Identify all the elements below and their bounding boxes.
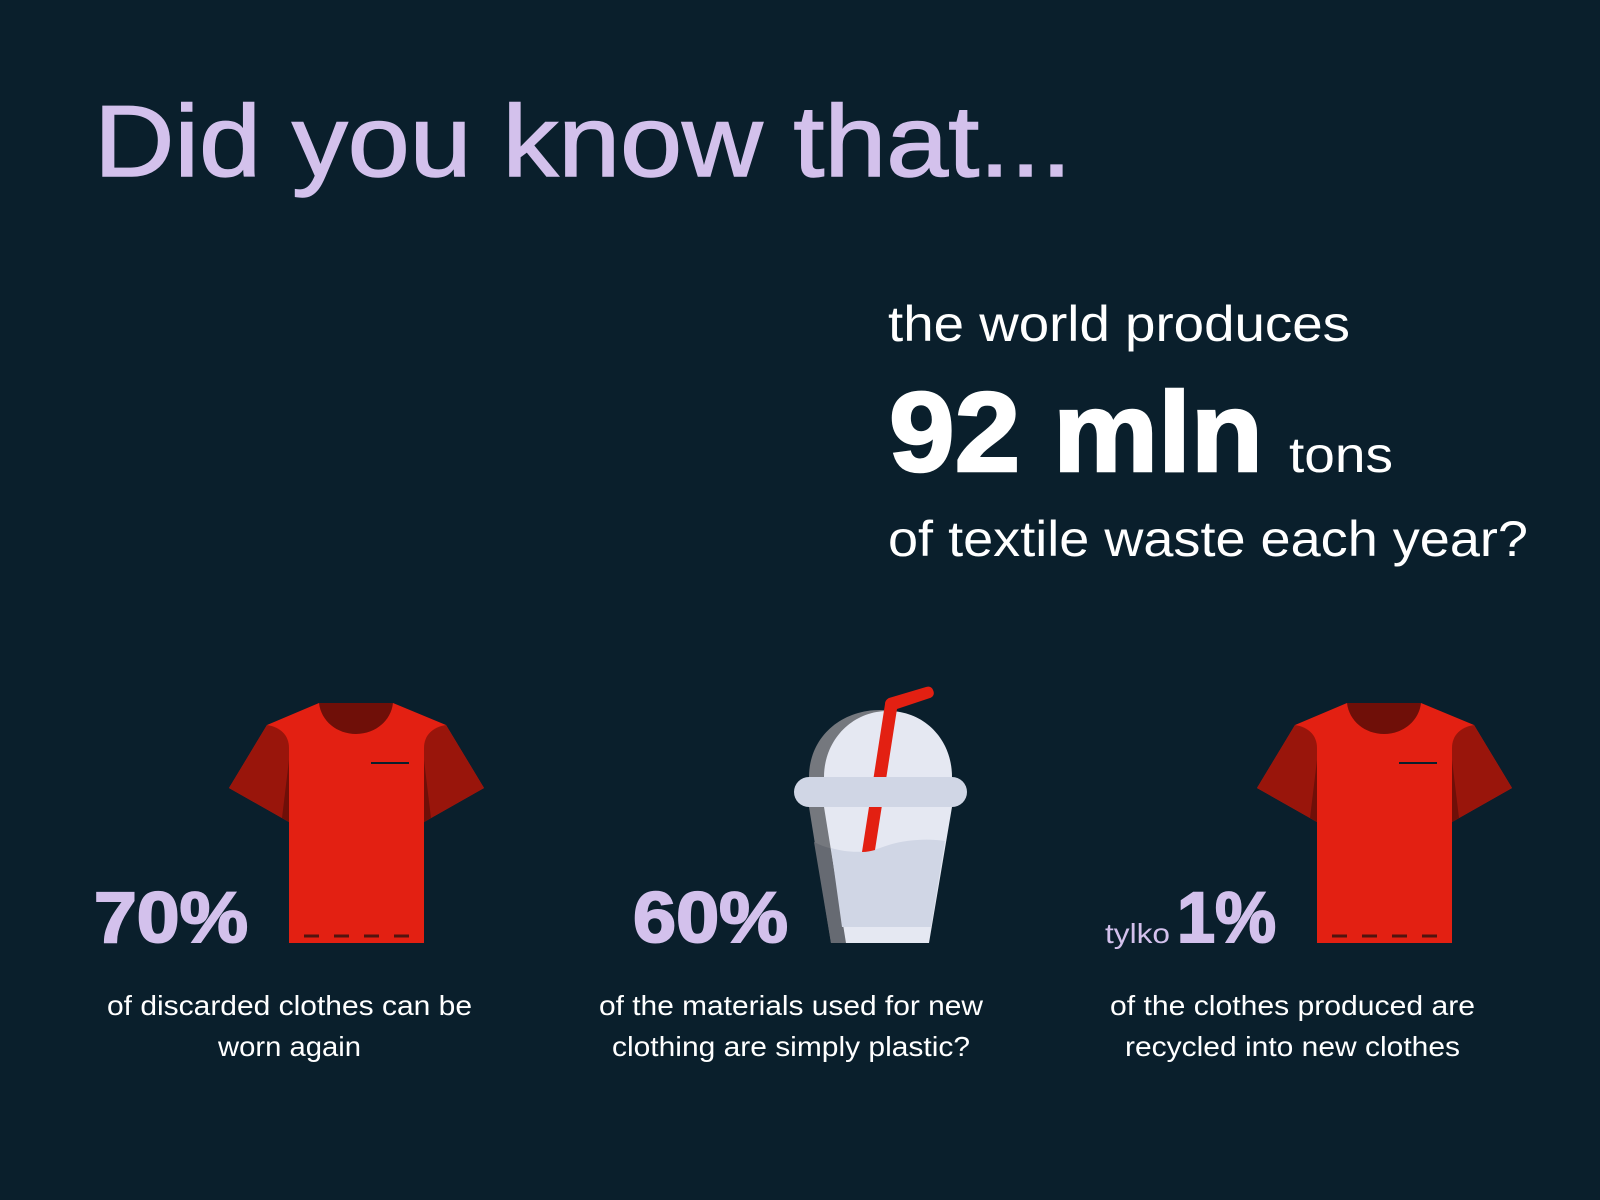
caption: of the clothes produced are	[1110, 990, 1475, 1021]
label: tylko: tylko	[1105, 918, 1170, 949]
caption: recycled into new clothes	[1125, 1031, 1460, 1062]
caption: clothing are simply plastic?	[612, 1031, 970, 1062]
icon: red t-shirt	[1257, 703, 1512, 943]
stat: 1%: 1%	[1177, 879, 1276, 958]
panel: 60 percent	[599, 687, 984, 1062]
stat: 60%: 60%	[633, 879, 788, 958]
unit: tons: tons	[1289, 427, 1393, 483]
caption: of the materials used for new	[599, 990, 984, 1021]
caption: of discarded clothes can be	[107, 990, 472, 1021]
headline statistic	[888, 296, 1528, 567]
number: 92 mln: 92 mln	[889, 369, 1263, 495]
icon: red t-shirt	[229, 703, 484, 943]
icon: plastic cup with straw	[794, 687, 967, 943]
panel: 70 percent	[94, 703, 484, 1062]
caption: worn again	[217, 1031, 361, 1062]
title: Did you know that...	[94, 86, 1072, 198]
stat: 70%: 70%	[94, 879, 248, 958]
line: of textile waste each year: of textile waste each year?	[888, 511, 1528, 567]
line: the world produces: the world produces	[888, 296, 1350, 352]
panel: 1 percent	[1105, 703, 1512, 1062]
